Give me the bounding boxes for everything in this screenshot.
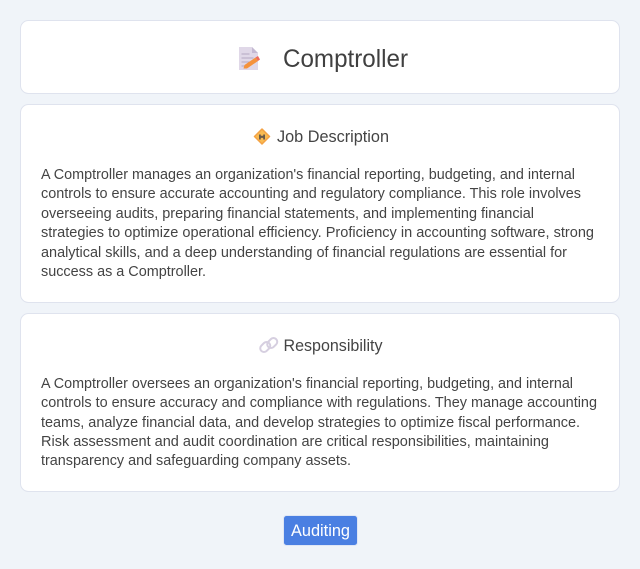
tag: auditing: Auditing [291,521,350,540]
responsibility text: Risk assessment and audit coordination are critical responsibilities, maintaining [41,434,549,450]
icon: chain link [259,336,279,354]
job description text: controls to ensure accurate accounting and regulatory compliance. This role involves [41,186,581,202]
heading: job description: Job Description [277,127,389,146]
responsibility text [41,376,597,469]
job description text [41,167,594,280]
panel: job description [20,104,620,302]
job description text: A Comptroller manages an organization's financial reporting, budgeting, and internal [41,167,575,183]
job description text: success as a Comptroller. [41,264,206,280]
responsibility text: teams, analyze financial data, and develop strategies to optimize fiscal performance. [41,415,580,431]
responsibility text: controls to ensure accuracy and compliance with regulations. They manage accounting [41,395,597,411]
panel: responsibility [20,314,620,492]
responsibility text: A Comptroller oversees an organization's financial reporting, budgeting, and internal [41,376,573,392]
panel: title [20,20,620,94]
job description text: overseeing audits, preparing financial statements, and implementing financial [41,206,534,222]
tag: auditing [284,516,358,546]
responsibility text: transparency and safeguarding company assets. [41,453,351,469]
job description text: strategies to optimize operational efficiency. Proficiency in accounting software, strong [41,225,594,241]
heading: responsibility: Responsibility [284,336,383,355]
icon: document with pencil [239,47,260,70]
title text: Comptroller [283,45,408,73]
job description text: analytical skills, and a deep understanding of financial regulations are essential for [41,245,567,261]
icon: orange diamond sign [254,129,270,144]
